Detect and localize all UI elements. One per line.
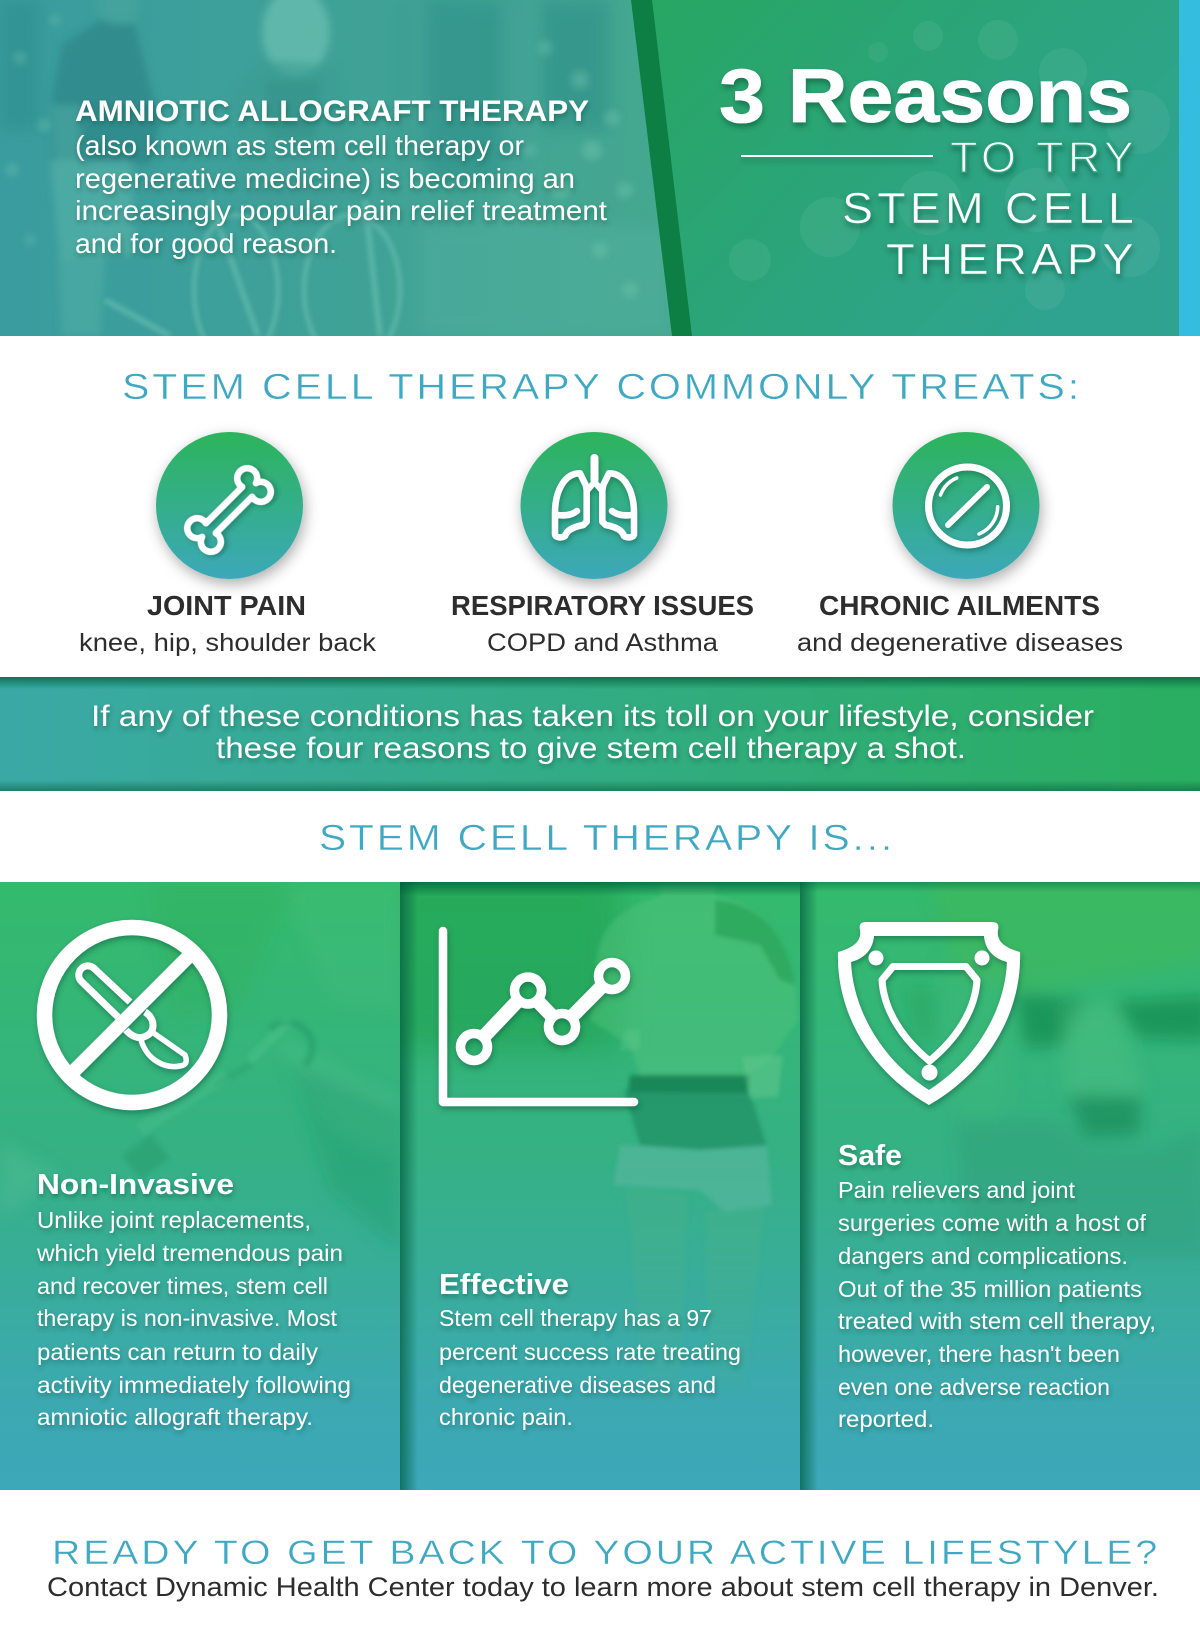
call to action [47, 1534, 1160, 1602]
item: joint pain: knee, hip, shoulder back [79, 629, 377, 657]
panel: safe: Pain relievers and joint [838, 1177, 1076, 1203]
icon: no surgery scalpel [44, 928, 220, 1102]
panel: non-invasive: amniotic allograft therapy. [37, 1404, 313, 1430]
panel: non-invasive: therapy is non-invasive. Most [37, 1305, 338, 1331]
section: commonly treats [79, 366, 1123, 657]
panel: safe: surgeries come with a host of [838, 1210, 1147, 1236]
panel: effective: percent success rate treating [439, 1339, 741, 1365]
icon: bone [183, 464, 275, 556]
panel: effective: chronic pain. [439, 1404, 573, 1430]
panel: non-invasive: patients can return to daily [37, 1339, 319, 1365]
main title: THERAPY [886, 235, 1138, 284]
main title [719, 54, 1138, 284]
panel: non-invasive: and recover times, stem cell [37, 1273, 328, 1299]
heading: therapy is: STEM CELL THERAPY IS... [319, 817, 895, 858]
item: respiratory issues: COPD and Asthma [487, 629, 718, 657]
panel: safe [800, 870, 1200, 1490]
icon: lungs [555, 458, 634, 537]
item: joint pain [79, 432, 377, 657]
icon: shield [838, 922, 1020, 1105]
item: respiratory issues: RESPIRATORY ISSUES [451, 590, 754, 621]
icon: no symbol [928, 467, 1006, 545]
intro text: increasingly popular pain relief treatment [75, 195, 607, 226]
item: respiratory issues [451, 432, 754, 657]
header band [0, 0, 1200, 365]
panel: non-invasive [0, 882, 400, 1490]
intro text: AMNIOTIC ALLOGRAFT THERAPY [75, 95, 589, 128]
heading: commonly treats: STEM CELL THERAPY COMMONLY TREATS: [122, 366, 1082, 407]
panel: non-invasive: activity immediately following [37, 1372, 351, 1398]
panel: effective: Effective [439, 1269, 569, 1301]
panel: effective [380, 860, 800, 1490]
intro text [75, 95, 607, 259]
item: joint pain: JOINT PAIN [147, 590, 306, 621]
panel: non-invasive: Non-Invasive [37, 1169, 234, 1201]
blue edge strip [1179, 0, 1200, 336]
panel: non-invasive: which yield tremendous pain [36, 1240, 343, 1266]
main title: STEM CELL [842, 184, 1138, 233]
item: chronic ailments [797, 432, 1123, 657]
diagonal accent [631, 0, 692, 336]
intro text: and for good reason. [75, 228, 337, 259]
panel: safe: even one adverse reaction [838, 1374, 1110, 1400]
item: chronic ailments: and degenerative diseases [797, 629, 1123, 657]
banner: If any of these conditions has taken its toll on your lifestyle, consider [91, 700, 1094, 733]
call to action: READY TO GET BACK TO YOUR ACTIVE LIFESTYLE? [52, 1534, 1160, 1572]
panel: safe: reported. [838, 1406, 934, 1432]
item: chronic ailments: CHRONIC AILMENTS [819, 590, 1100, 621]
intro text: (also known as stem cell therapy or [75, 130, 524, 161]
banner [0, 677, 1200, 791]
main title: TO TRY [950, 133, 1138, 182]
panel: safe: dangers and complications. [838, 1243, 1128, 1269]
intro text: regenerative medicine) is becoming an [75, 163, 575, 194]
icon: line chart [443, 931, 634, 1102]
call to action: Contact Dynamic Health Center today to learn more about stem cell therapy in Denver. [47, 1572, 1159, 1602]
main title: 3 Reasons [719, 54, 1132, 139]
panel: safe: Safe [838, 1140, 902, 1172]
header photo panel [0, 0, 672, 336]
header title panel [640, 0, 1180, 336]
panel: effective: degenerative diseases and [439, 1372, 716, 1398]
panel: safe: Out of the 35 million patients [838, 1276, 1142, 1302]
panel: effective: Stem cell therapy has a 97 [439, 1305, 712, 1331]
panel: safe: however, there hasn't been [838, 1341, 1120, 1367]
panel: non-invasive: Unlike joint replacements, [37, 1207, 311, 1233]
panel: safe: treated with stem cell therapy, [838, 1308, 1156, 1334]
banner: these four reasons to give stem cell therapy a shot. [216, 732, 966, 765]
